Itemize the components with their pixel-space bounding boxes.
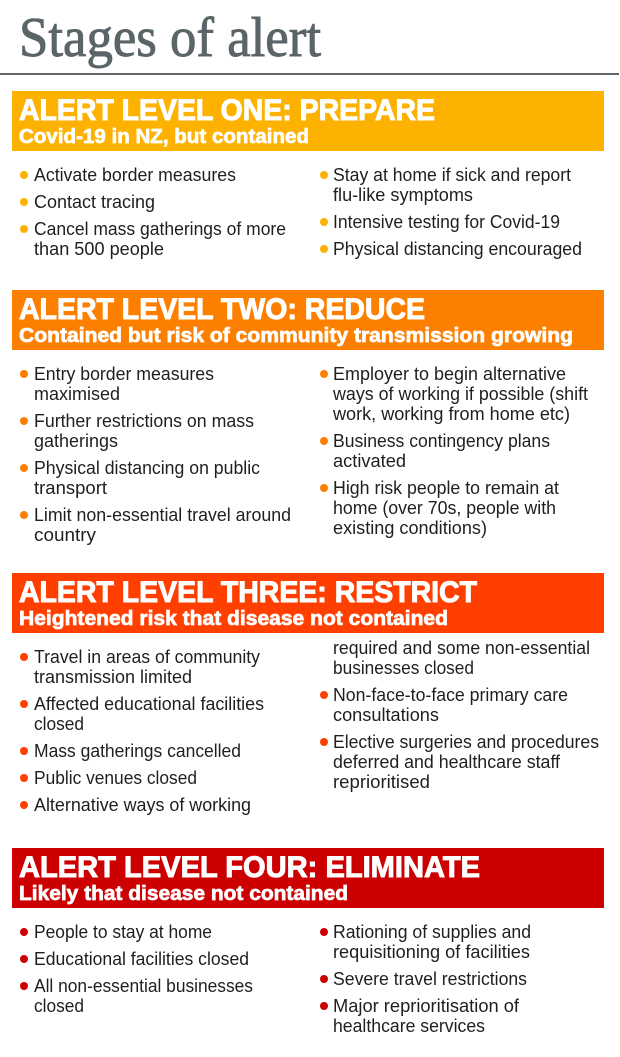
list: level three right: Elective surgeries and procedures [333,732,599,752]
list: level two right: ways of working if possible (shift [332,384,588,404]
list: level two right [320,364,588,538]
header: level three: ALERT LEVEL THREE: RESTRICT [19,576,477,609]
list: level four right: healthcare services [333,1016,485,1036]
list: level three left: Alternative ways of working [34,795,251,815]
list: level three right: consultations [333,705,439,725]
panel: alert level two [12,290,604,545]
list: level three left: Public venues closed [34,768,197,788]
list: level two left: maximised [34,384,120,404]
header: level two: ALERT LEVEL TWO: REDUCE [19,293,425,326]
list: level four left: All non-essential businesses [34,976,253,996]
header: level four [12,848,604,908]
list: level two right: work, working from home etc) [332,404,570,424]
list: level one right: Intensive testing for Covid-19 [333,212,560,232]
list: level three left: closed [34,714,84,734]
list: level three right: Non-face-to-face primary care [333,685,568,705]
header: level four: ALERT LEVEL FOUR: ELIMINATE [19,851,480,884]
list: level three left: Affected educational facilities [34,694,264,714]
list: level two left: transport [34,478,107,498]
panel: alert level three [12,573,604,815]
list: level two right: Employer to begin alternative [333,364,566,384]
list: level three right: businesses closed [333,658,474,678]
list: level two left: Entry border measures [34,364,214,384]
title: Stages of alert [19,7,321,69]
header: level one: ALERT LEVEL ONE: PREPARE [19,94,435,127]
list: level one left [20,165,286,259]
list: level four right: requisitioning of facilities [333,942,530,962]
list: level one right: Physical distancing encouraged [333,239,582,259]
list: level three right: deferred and healthcare staff [333,752,561,772]
list: level four left [20,922,253,1016]
list: level four right [320,922,531,1036]
list: level three left: transmission limited [34,667,192,687]
list: level two left: Limit non-essential travel around [34,505,291,525]
list: level two left: Further restrictions on mass [34,411,254,431]
list: level one right [320,165,582,259]
list: level four left: closed [34,996,84,1016]
list: level four right: Severe travel restrictions [333,969,527,989]
list: level one right: Stay at home if sick and report [333,165,571,185]
panel: alert level one [12,91,604,259]
list: level two right: activated [333,451,406,471]
list: level three left [20,647,264,815]
list: level three left: Mass gatherings cancelled [34,741,241,761]
list: level three left: Travel in areas of community [34,647,260,667]
list: level two right: home (over 70s, people with [333,498,556,518]
list: level two left: Physical distancing on public [34,458,260,478]
list: level three right: required and some non-essential [333,638,590,658]
list: level three right: reprioritised [333,772,430,792]
list: level three right [320,638,599,792]
list: level two left: country [34,525,96,545]
list: level one left: Activate border measures [34,165,236,185]
header: level one [12,91,604,151]
list: level four right: Major reprioritisation of [333,996,520,1016]
list: level two right: High risk people to remain at [333,478,559,498]
list: level two left [20,364,291,545]
list: level one right: flu-like symptoms [333,185,473,205]
header: level two: Contained but risk of community transmission growing [19,325,573,347]
header: level three: Heightened risk that disease not contained [19,608,448,630]
list: level four left: People to stay at home [34,922,212,942]
panel: alert level four [12,848,604,1036]
list: level four right: Rationing of supplies and [333,922,531,942]
header: level four: Likely that disease not contained [19,883,348,905]
header: level one: Covid-19 in NZ, but contained [19,126,309,148]
header: level three [12,573,604,633]
header: level two [12,290,604,350]
list: level two right: Business contingency plans [333,431,550,451]
list: level one left: Cancel mass gatherings of more [34,219,286,239]
list: level one left: than 500 people [34,239,164,259]
list: level two left: gatherings [34,431,118,451]
list: level one left: Contact tracing [34,192,155,212]
list: level four left: Educational facilities closed [34,949,249,969]
list: level two right: existing conditions) [333,518,487,538]
